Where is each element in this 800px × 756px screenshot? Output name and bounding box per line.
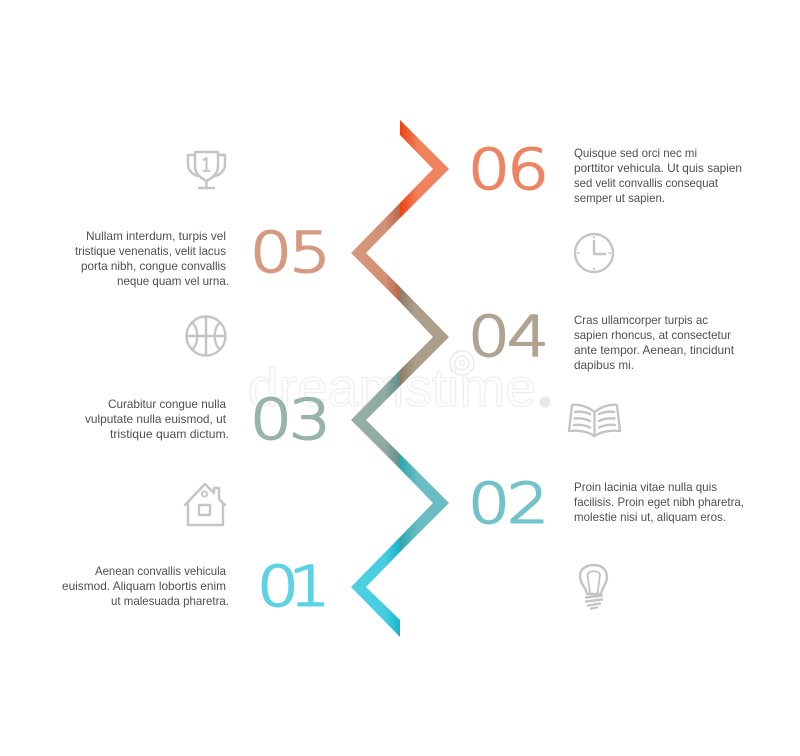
text block 01: Aenean convallis vehicula [95,565,226,578]
text block 06: Quisque sed orci nec mi [574,147,697,160]
text block 05: tristique venenatis, velit lacus [75,245,226,258]
icon: trophy [188,152,225,188]
number 05: 05 [250,222,331,285]
segment 01 [351,537,400,637]
number 02: 02 [468,473,549,536]
text block 03: vulputate nulla euismod, ut [85,413,227,426]
text block 02 [574,481,744,524]
text block 01: euismod. Aliquam lobortis enim [62,580,226,593]
text block 06: porttitor vehicula. Ut quis sapien [574,162,742,175]
text block 05: porta nibh, congue convallis [81,260,226,273]
text block 05: Nullam interdum, turpis vel [86,230,226,243]
icon: open book [569,405,620,436]
text block 06: sed velit convallis consequat [574,177,719,190]
watermark: dreamstime [248,358,536,418]
text block 01: ut malesuada pharetra. [111,595,229,608]
icon: basketball [186,316,226,356]
icon: house [185,484,225,525]
icon: light bulb [580,565,607,608]
segment 03 [351,370,400,469]
number 03: 03 [250,389,331,452]
number 06: 06 [468,139,549,202]
number 01: 01 [257,556,331,619]
text block 04 [574,314,735,372]
text block 04: dapibus mi. [574,359,634,372]
text block 03: Curabitur congue nulla [108,398,226,411]
text block 04: sapien rhoncus, at consectetur [574,329,731,342]
text block 04: Cras ullamcorper turpis ac [574,314,708,327]
text block 02: molestie nisi ut, aliquam eros. [574,511,726,524]
segment 04 [400,287,449,386]
text block 03 [85,398,229,441]
segment 02 [400,454,449,552]
text block 06: semper ut sapien. [574,192,665,205]
number 04: 04 [468,306,549,369]
icon: clock [575,234,613,272]
zigzag ribbon [351,120,449,637]
segment 06 [400,120,449,218]
text block 02: facilisis. Proin eget nibh pharetra, [574,496,744,509]
text block 03: tristique quam dictum. [110,428,229,441]
segment 05 [351,203,400,302]
text block 06 [574,147,742,205]
text block 04: ante tempor. Aenean, tincidunt [574,344,735,357]
text block 01 [62,565,229,608]
text block 05: neque quam vel urna. [117,275,229,288]
text block 02: Proin lacinia vitae nulla quis [574,481,717,494]
text block 05 [75,230,229,288]
